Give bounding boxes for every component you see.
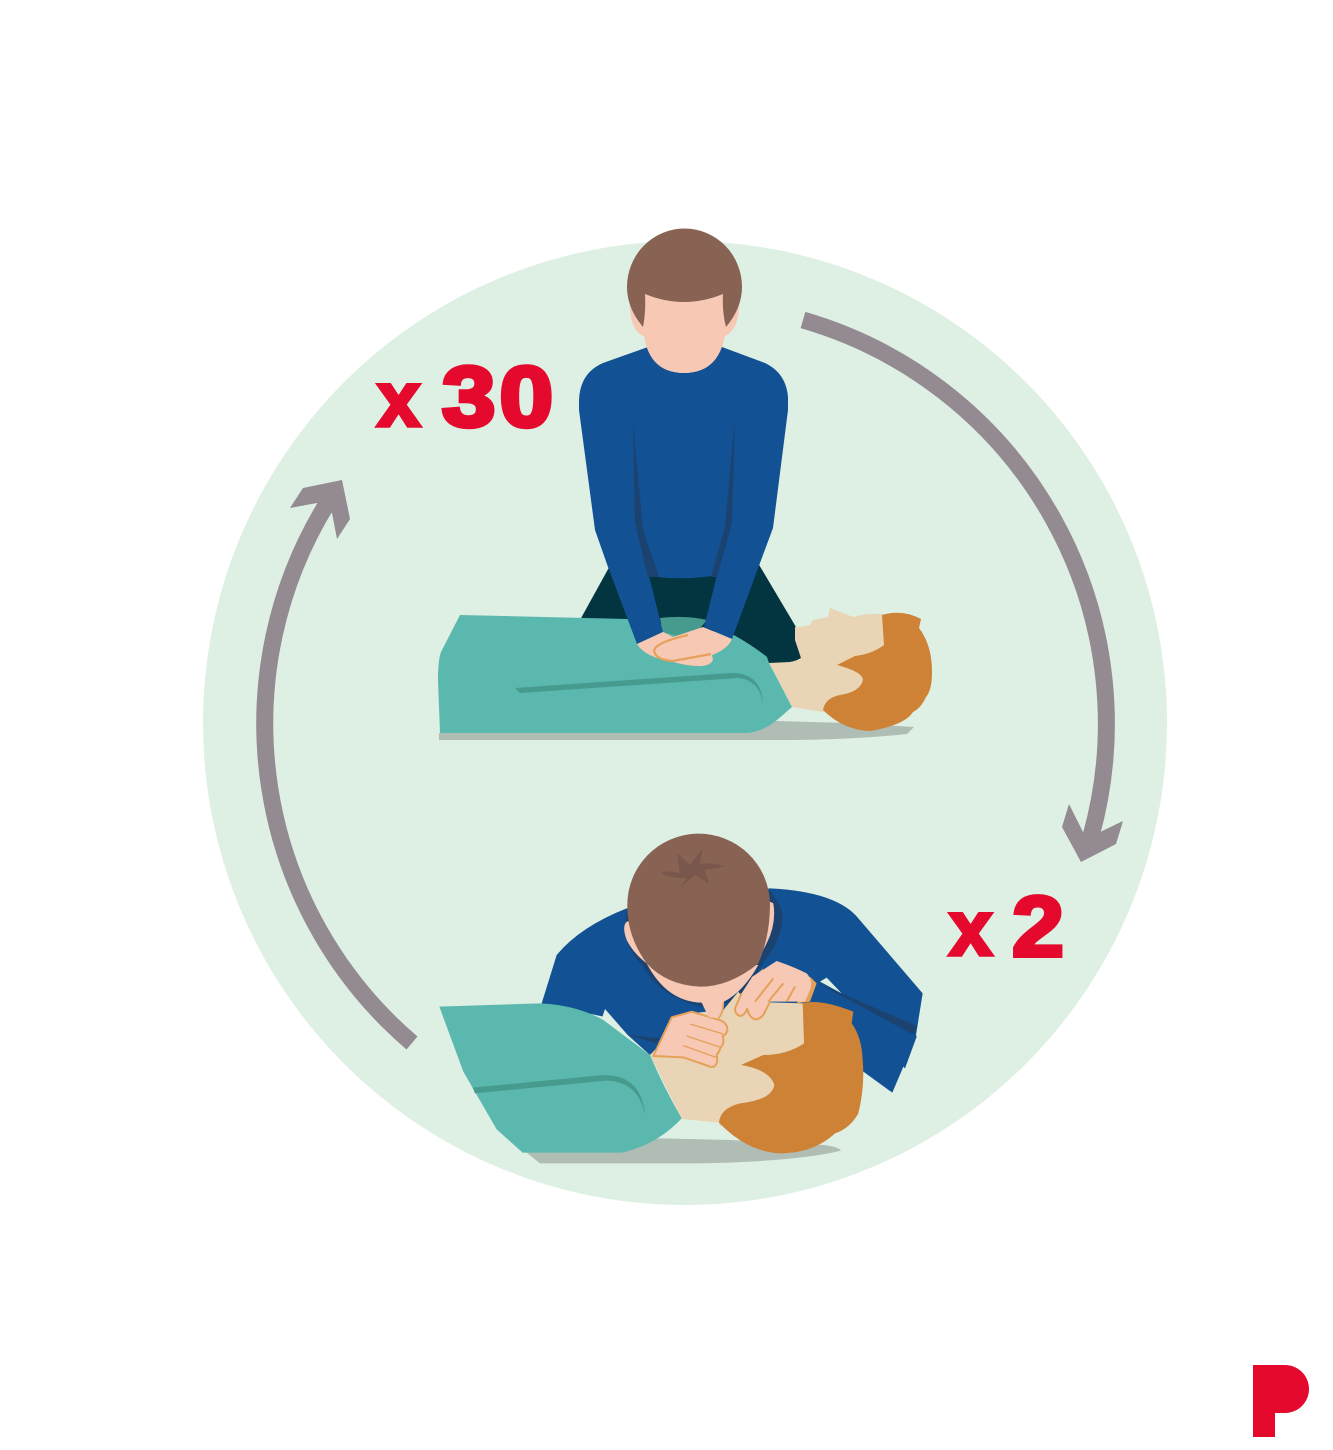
label: x 2: 2 xyxy=(1012,879,1064,974)
figure: chest compressions xyxy=(438,228,932,740)
nose outline xyxy=(718,1003,723,1018)
sleeve crease left xyxy=(628,1035,660,1043)
shadow around head xyxy=(624,890,783,1007)
sleeve crease right xyxy=(818,983,917,1035)
shirt fold xyxy=(473,1075,645,1115)
hand back shade xyxy=(752,968,817,1003)
rescuer hair xyxy=(627,834,770,987)
rescuer legs xyxy=(580,558,801,663)
label: x 30: x xyxy=(377,355,420,443)
patient head and neck xyxy=(650,992,817,1127)
rescuer ears xyxy=(630,295,739,337)
patient hair xyxy=(823,613,932,731)
hands xyxy=(637,627,732,666)
finger outline xyxy=(735,978,795,1019)
patient head and neck xyxy=(769,608,895,712)
chest shading xyxy=(660,617,707,636)
arrow: compressions to breaths xyxy=(803,320,1123,862)
label: x 2 xyxy=(949,879,1064,974)
hand lifting chin xyxy=(734,961,811,1019)
patient body xyxy=(439,1003,682,1153)
gap under right arm xyxy=(820,978,842,993)
label: x 30: 30 xyxy=(442,350,553,445)
rescuer neck xyxy=(647,340,722,365)
ground shadow xyxy=(527,1138,841,1163)
rescuer hair xyxy=(627,228,742,327)
arm shadow right xyxy=(711,417,735,577)
figure: rescue breaths xyxy=(439,834,923,1163)
background circle xyxy=(203,241,1167,1205)
gap under left arm xyxy=(602,1009,628,1035)
rescuer face and nose xyxy=(647,963,758,1018)
label: x 30 xyxy=(377,350,553,445)
arrow: breaths to compressions xyxy=(265,480,412,1043)
hair whorl xyxy=(660,849,725,888)
rescuer ears xyxy=(624,900,774,963)
arm shadow left xyxy=(633,423,659,577)
ground shadow xyxy=(439,721,914,740)
shirt fold xyxy=(515,673,763,705)
rescuer torso and arms xyxy=(579,347,788,644)
patient body xyxy=(438,615,792,733)
rescuer face xyxy=(643,290,726,373)
fist pinching nose xyxy=(653,1012,727,1067)
logo xyxy=(1253,1365,1309,1437)
finger lines xyxy=(683,1024,723,1057)
label: x 2: x xyxy=(949,884,992,972)
hand outline xyxy=(654,635,711,661)
patient hair xyxy=(719,1002,863,1153)
rescuer torso and arms xyxy=(542,888,923,1093)
